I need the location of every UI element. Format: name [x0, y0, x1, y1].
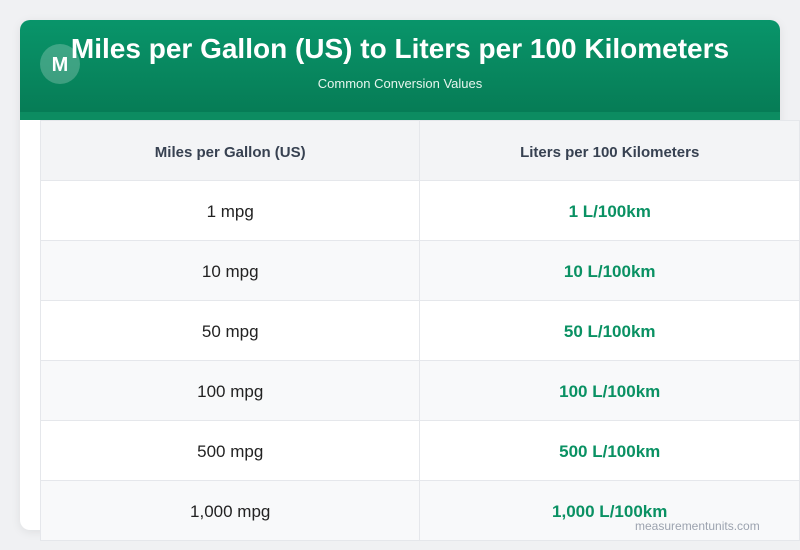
- conversion table: 10 L/100km: [564, 262, 656, 281]
- icon: logo M: [40, 44, 80, 84]
- conversion table: 50 mpg: [202, 322, 259, 341]
- header: [20, 20, 780, 120]
- conversion table: 1 L/100km: [569, 202, 651, 221]
- conversion table: 10 mpg: [202, 262, 259, 281]
- icon: logo M: M: [52, 54, 68, 76]
- watermark: measurementunits.com: [635, 519, 760, 533]
- conversion table: [40, 120, 800, 541]
- conversion table: 100 L/100km: [559, 382, 660, 401]
- title: Miles per Gallon (US) to Liters per 100 Kilometers: [71, 33, 729, 64]
- conversion table: 500 mpg: [197, 442, 263, 461]
- conversion table: 1,000 mpg: [190, 502, 270, 521]
- conversion table: 1 mpg: [207, 202, 254, 221]
- conversion table: 50 L/100km: [564, 322, 656, 341]
- conversion table: 500 L/100km: [559, 442, 660, 461]
- conversion table: 1,000 L/100km: [552, 502, 667, 521]
- subtitle: Common Conversion Values: [318, 76, 482, 91]
- conversion table: Liters per 100 Kilometers: [520, 144, 699, 160]
- conversion table: Miles per Gallon (US): [155, 144, 306, 160]
- conversion table: 100 mpg: [197, 382, 263, 401]
